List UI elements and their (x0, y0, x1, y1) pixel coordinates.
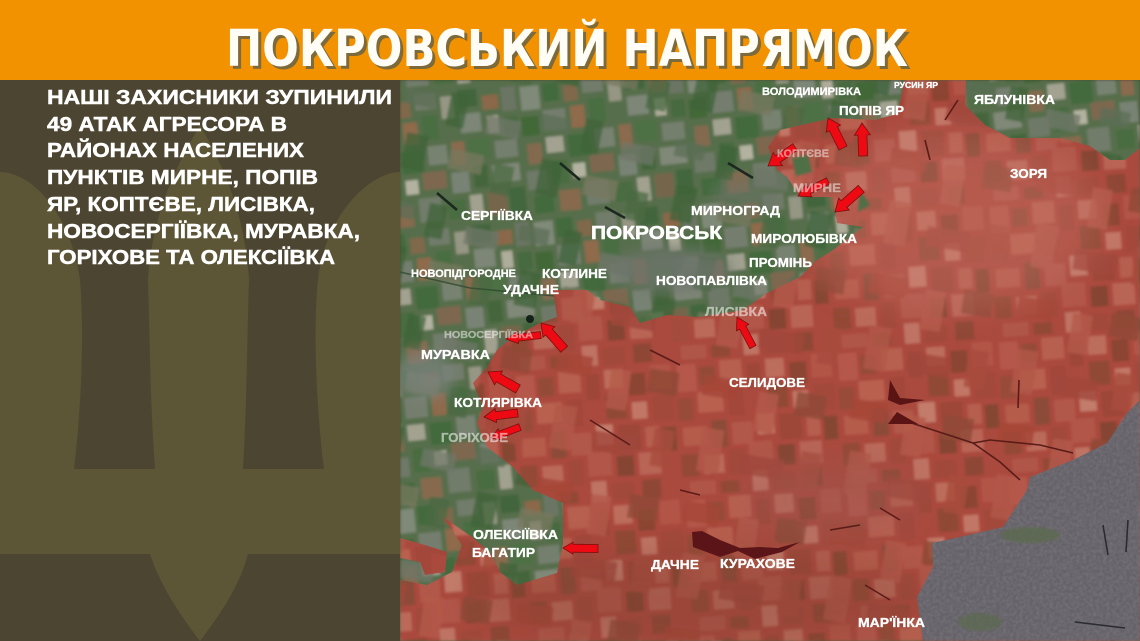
label: Мирноград: МИРНОГРАД (691, 203, 781, 218)
label: Олексіївка: ОЛЕКСІЇВКА (473, 527, 559, 542)
map: unoccupied green territory (395, 80, 1140, 641)
header bar (0, 0, 1140, 80)
text block: attack summary (47, 86, 392, 269)
arrow: Новосергіївка (505, 331, 542, 344)
arrow: Горіхове (490, 423, 522, 440)
label: Новопідгородне: НОВОПІДГОРОДНЕ (411, 268, 516, 280)
label: Попів Яр: ПОПІВ ЯР (839, 103, 904, 118)
label: Зоря: ЗОРЯ (1010, 166, 1047, 181)
label: Сергіївка: СЕРГІЇВКА (461, 208, 534, 223)
label: Муравка: МУРАВКА (421, 347, 491, 362)
label: Новопавлівка: НОВОПАВЛІВКА (656, 273, 768, 288)
map: green pockets (792, 155, 870, 212)
arrow: Удачне (540, 322, 568, 353)
arrow: Мирне east (834, 185, 865, 212)
map: ravines (590, 100, 1073, 600)
text block: attack summary: ГОРІХОВЕ ТА ОЛЕКСІЇВКА (47, 246, 335, 269)
arrows: attack directions (483, 114, 871, 555)
panel: left info panel (0, 80, 400, 641)
label: Мирне: МИРНЕ (793, 181, 841, 195)
text block: attack summary: НОВОСЕРГІЇВКА, МУРАВКА, (47, 220, 360, 243)
label: Дачне: ДАЧНЕ (651, 557, 699, 572)
label: Мар'їнка: МАР'ЇНКА (858, 615, 926, 630)
label: Лисівка: ЛИСІВКА (705, 304, 768, 319)
label: Котлине: КОТЛИНЕ (542, 266, 607, 281)
arrow: Попів Яр east (854, 123, 871, 156)
arrow: Лисівка (736, 316, 756, 350)
label: Володимирівка: ВОЛОДИМИРІВКА (762, 86, 861, 98)
arrow: Попів Яр west (826, 118, 848, 150)
label: Коптєве: КОПТЄВЕ (777, 148, 829, 160)
text block: attack summary: 49 АТАК АГРЕСОРА В (47, 113, 287, 136)
title: ПОКРОВСЬКИЙ НАПРЯМОК (229, 21, 911, 82)
label: Удачне: УДАЧНЕ (503, 282, 559, 297)
text block: attack summary: РАЙОНАХ НАСЕЛЕНИХ (47, 138, 304, 162)
label: Курахове: КУРАХОВЕ (720, 556, 795, 571)
map: reservoir (692, 531, 800, 559)
arrow: Коптєве (768, 143, 798, 166)
label: Русин Яр: РУСИН ЯР (894, 80, 938, 90)
arrow: Олексіївка (563, 542, 598, 555)
panel: satellite map (395, 80, 1140, 641)
arrow: Мирне west (797, 178, 830, 198)
label: Покровськ: ПОКРОВСЬК (591, 223, 723, 243)
label: Селидове: СЕЛИДОВЕ (729, 375, 805, 390)
map: occupied red territory (400, 80, 1140, 641)
map: grey urban area (900, 395, 1140, 641)
map labels: settlements (411, 80, 1056, 630)
text block: attack summary: НАШІ ЗАХИСНИКИ ЗУПИНИЛИ (47, 86, 392, 109)
label: Новосергіївка: НОВОСЕРГІЇВКА (444, 328, 533, 341)
label: Багатир: БАГАТИР (472, 545, 535, 560)
icon: trident emblem (0, 125, 400, 641)
arrow: Муравка (488, 370, 521, 394)
arrow: Котлярівка (483, 408, 519, 424)
text block: attack summary: ПУНКТІВ МИРНЕ, ПОПІВ (47, 166, 318, 189)
label: Миролюбівка: МИРОЛЮБІВКА (751, 231, 858, 246)
text block: attack summary: ЯР, КОПТЄВЕ, ЛИСІВКА, (47, 193, 315, 216)
label: Промінь: ПРОМІНЬ (749, 255, 812, 270)
label: Яблунівка: ЯБЛУНІВКА (974, 92, 1056, 107)
label: Котлярівка: КОТЛЯРІВКА (454, 395, 543, 410)
label: Горіхове: ГОРІХОВЕ (441, 430, 508, 445)
title: ПОКРОВСЬКИЙ НАПРЯМОК (226, 18, 908, 79)
